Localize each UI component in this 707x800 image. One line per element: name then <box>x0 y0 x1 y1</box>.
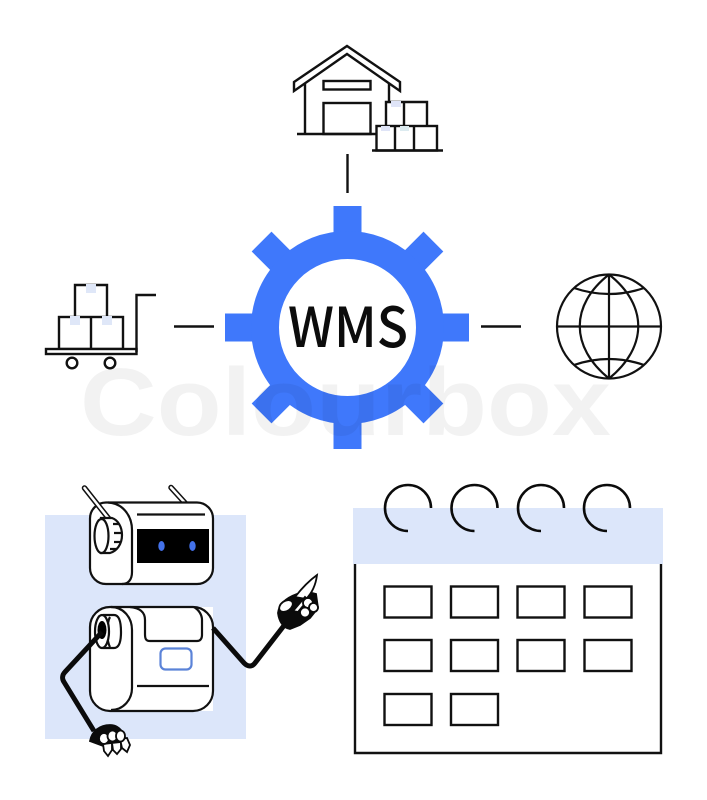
watermark: Colourbox <box>80 349 611 456</box>
robot right antenna <box>171 488 186 504</box>
connector: cart to gear <box>174 325 214 328</box>
illustration: calendar <box>353 485 663 753</box>
robot body <box>90 607 213 711</box>
icon: warehouse with boxes <box>294 46 443 150</box>
illustration: robot <box>63 488 318 756</box>
robot visor <box>137 529 209 563</box>
robot hand: pointing <box>277 575 318 629</box>
robot dial <box>94 518 122 553</box>
calendar header band <box>353 508 663 564</box>
panel: robot backdrop <box>45 515 246 739</box>
icon: hand cart with boxes <box>46 284 156 368</box>
robot head <box>84 488 213 584</box>
calendar rings <box>385 485 630 531</box>
connector: warehouse to gear <box>346 154 349 193</box>
gear: WMS <box>225 206 469 449</box>
icon: globe <box>557 274 661 378</box>
calendar page <box>355 564 661 753</box>
robot shoulder wheel <box>95 615 121 648</box>
connector: gear to globe <box>481 325 521 328</box>
robot hand: lower <box>90 725 130 756</box>
calendar date cells <box>384 586 632 725</box>
robot left antenna <box>84 488 109 519</box>
robot arms <box>63 623 286 731</box>
gear label: WMS <box>288 283 408 363</box>
